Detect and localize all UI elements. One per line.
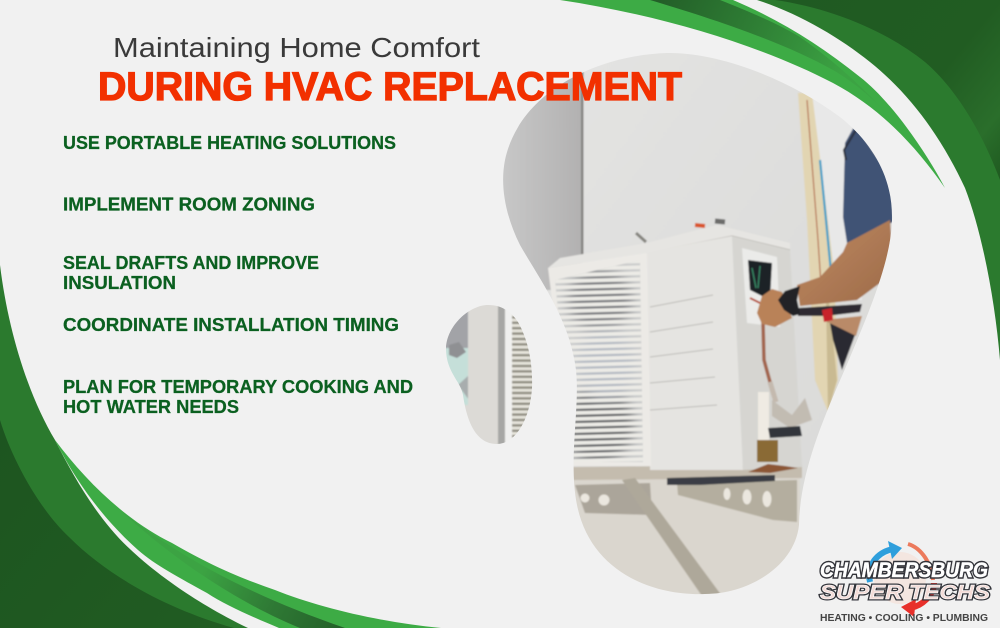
logo wordmark: Super Techs: SUPER TECHS xyxy=(820,582,991,604)
tip 3: SEAL DRAFTS AND IMPROVE xyxy=(63,253,319,273)
logo wordmark: Chambersburg: CHAMBERSBURG xyxy=(820,559,988,582)
small photo blob: close-up of unit xyxy=(446,305,532,444)
tip 5: HOT WATER NEEDS xyxy=(63,397,239,417)
tip 5 xyxy=(63,377,413,417)
logo tagline: HEATING • COOLING • PLUMBING xyxy=(820,612,988,624)
title: first line: Maintaining Home Comfort xyxy=(113,32,480,63)
logo wordmark: Super Techs: SUPER TECHS xyxy=(820,582,991,604)
icon: circular blue and red arrows xyxy=(869,541,934,617)
swoosh: top right corner xyxy=(560,0,1000,360)
title: second line: DURING HVAC REPLACEMENT xyxy=(98,65,682,109)
swoosh: bottom left corner xyxy=(0,265,441,628)
logo wordmark: Chambersburg: CHAMBERSBURG xyxy=(820,559,988,582)
tip 5: PLAN FOR TEMPORARY COOKING AND xyxy=(63,377,413,397)
photo: technician servicing outdoor AC unit xyxy=(500,50,900,600)
tip 1: USE PORTABLE HEATING SOLUTIONS xyxy=(63,133,396,153)
tip 3 xyxy=(63,253,319,293)
tip 3: INSULATION xyxy=(63,273,176,293)
tip 4: COORDINATE INSTALLATION TIMING xyxy=(63,315,399,335)
tip 2: IMPLEMENT ROOM ZONING xyxy=(63,194,315,214)
logo: Chambersburg Super Techs xyxy=(820,541,991,624)
